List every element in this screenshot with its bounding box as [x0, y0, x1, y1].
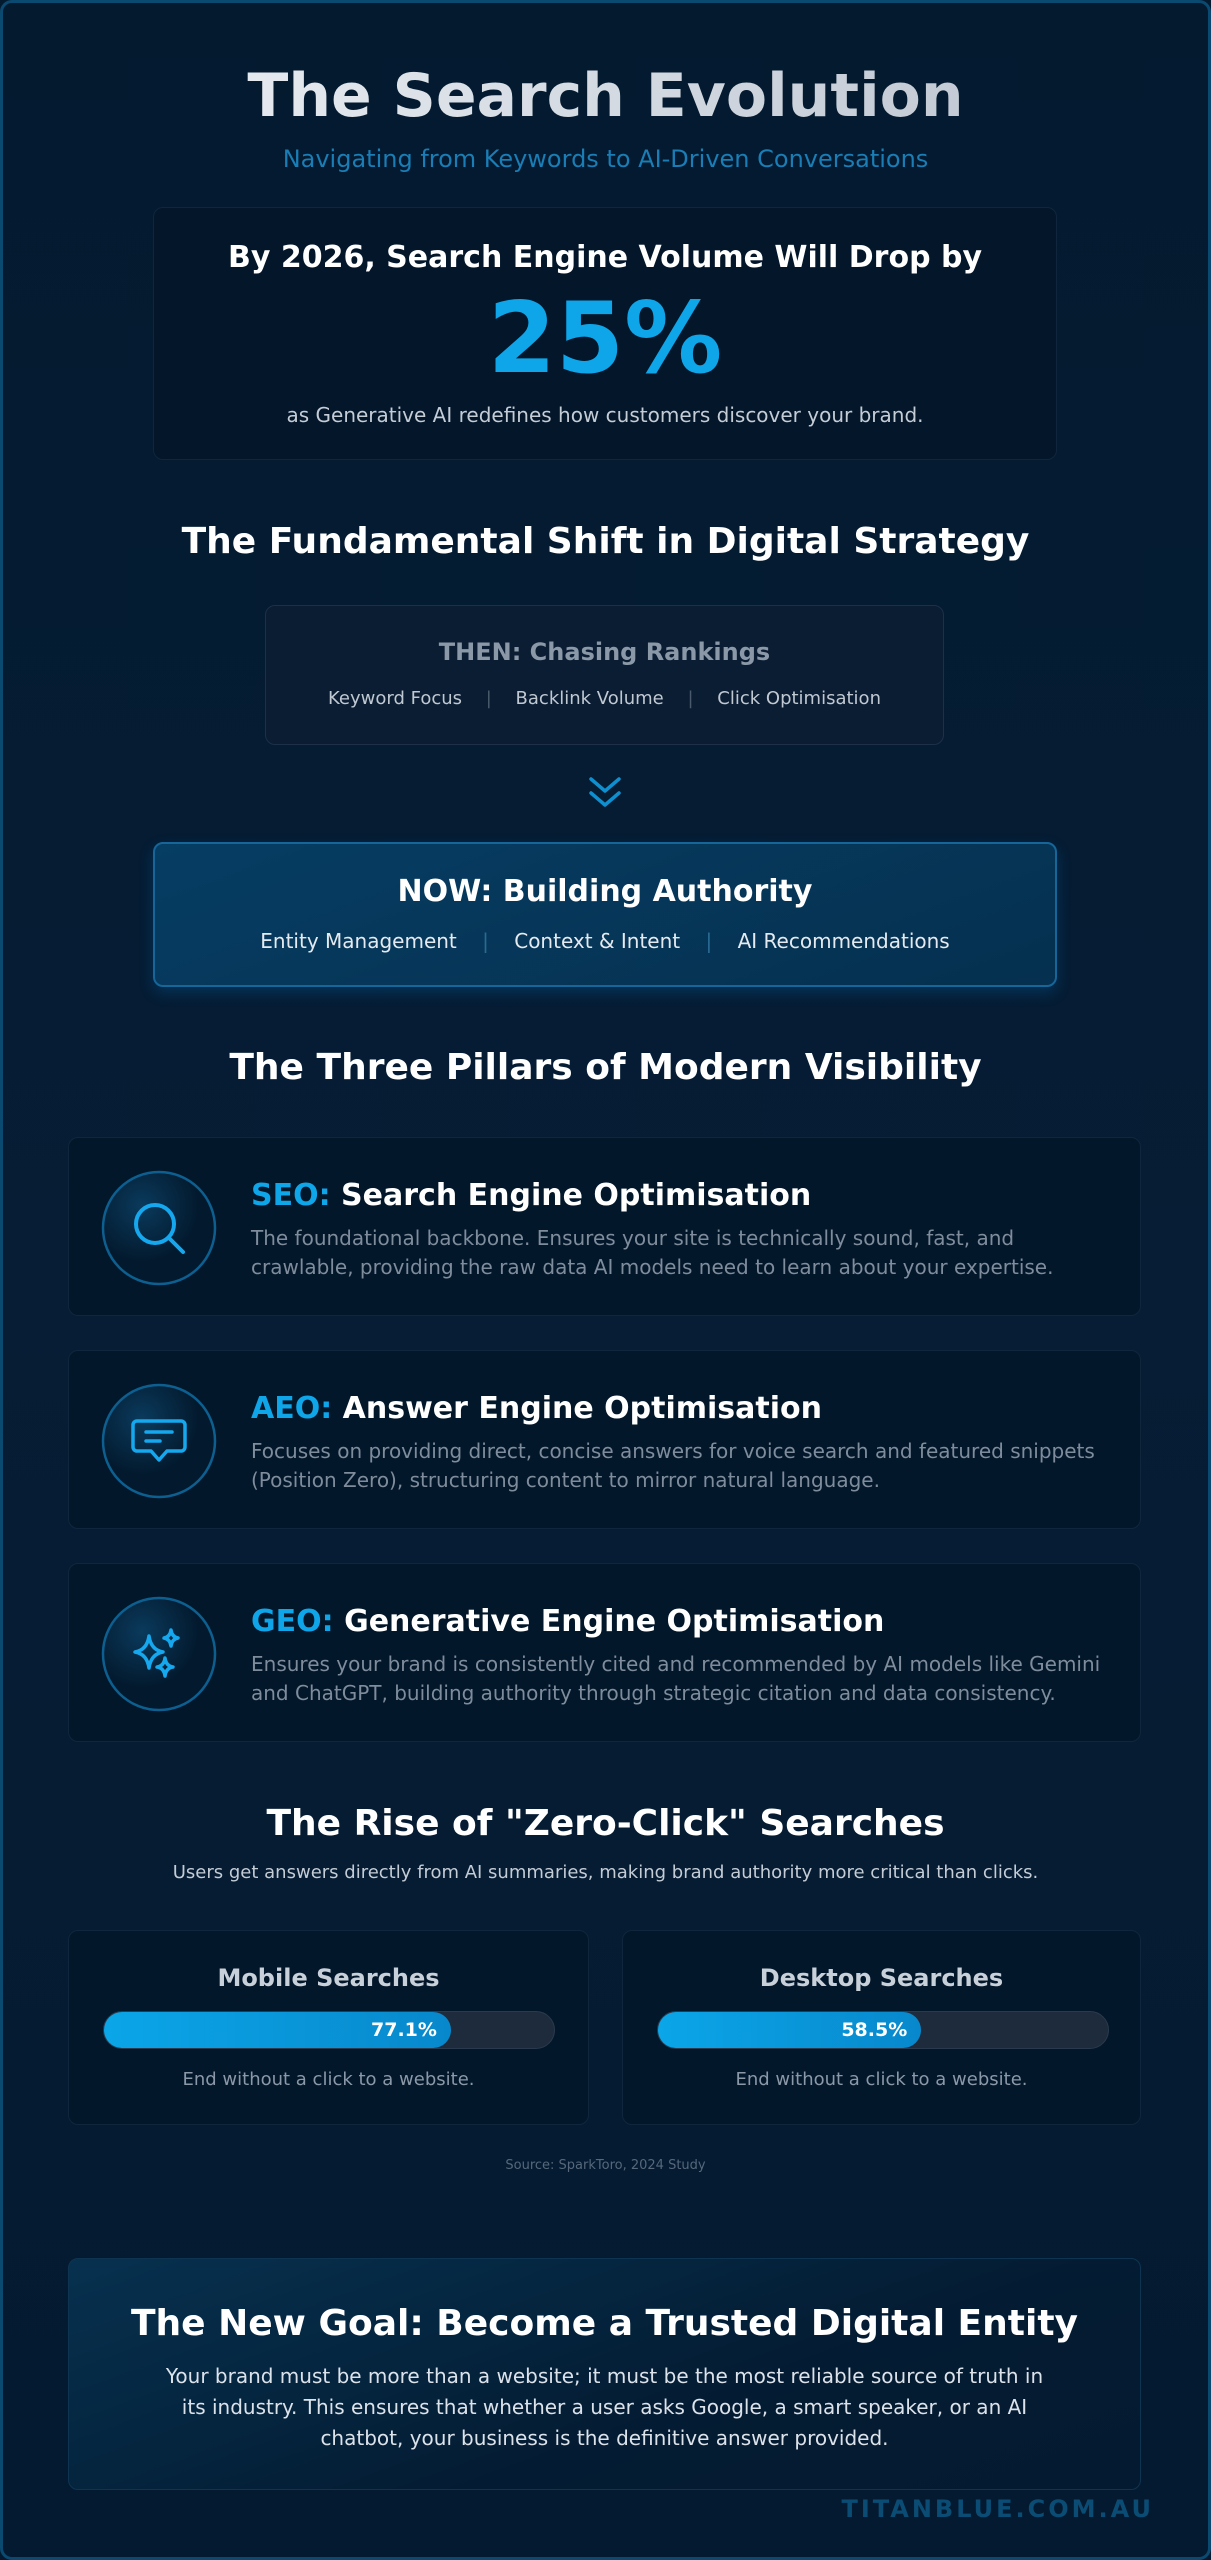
THEN box	[265, 605, 944, 745]
panel: SEO	[68, 1137, 1141, 1316]
stat heading: By 2026, Search Engine Volume Will Drop by	[228, 240, 982, 275]
NOW box	[153, 842, 1057, 987]
SEO text: The foundational backbone. Ensures your site is technically sound, fast, and crawlable, providing the raw data AI models need to learn about your expertise.	[251, 1226, 1053, 1279]
bar: mobile 77.1%: 77.1%	[371, 2019, 437, 2041]
panel: mobile	[68, 1930, 589, 2125]
desktop caption: End without a click to a website.	[735, 2069, 1028, 2090]
goal heading: The New Goal: Become a Trusted Digital Entity	[131, 2303, 1078, 2344]
arrow: chevron down	[589, 777, 621, 807]
stat box	[153, 207, 1057, 460]
then heading: THEN: Chasing Rankings	[439, 638, 770, 666]
desktop title: Desktop Searches	[760, 1964, 1003, 1992]
then items: Keyword Focus | Backlink Volume | Click Optimisation	[328, 688, 881, 709]
heading: fundamental shift: The Fundamental Shift in Digital Strategy	[182, 521, 1029, 562]
stat caption: as Generative AI redefines how customers discover your brand.	[286, 403, 924, 427]
heading: three pillars: The Three Pillars of Modern Visibility	[229, 1047, 982, 1088]
title	[0, 60, 1211, 132]
heading: zero-click: The Rise of "Zero-Click" Searches	[266, 1803, 945, 1844]
source note: Source: SparkToro, 2024 Study	[505, 2158, 706, 2173]
bar: desktop 58.5%: 58.5%	[841, 2019, 907, 2041]
GEO text: Ensures your brand is consistently cited and recommended by AI models like Gemini and ChatGPT, building authority through strategic citation and data consistency.	[251, 1652, 1100, 1705]
subtitle: Navigating from Keywords to AI-Driven Conversations	[283, 145, 928, 173]
panel: desktop	[622, 1930, 1141, 2125]
brand footer: TITANBLUE.COM.AU	[841, 2495, 1154, 2523]
zero-click subtitle: Users get answers directly from AI summaries, making brand authority more critical than clicks.	[173, 1862, 1038, 1883]
AEO text: Focuses on providing direct, concise answers for voice search and featured snippets (Position Zero), structuring content to mirror natural language.	[251, 1439, 1095, 1492]
GEO heading: GEO: Generative Engine Optimisation	[251, 1604, 884, 1639]
now items: Entity Management | Context & Intent | AI Recommendations	[260, 929, 950, 953]
panel: AEO	[68, 1350, 1141, 1529]
title: The Search Evolution	[247, 61, 964, 131]
AEO heading: AEO: Answer Engine Optimisation	[251, 1391, 822, 1426]
panel: GEO	[68, 1563, 1141, 1742]
icon: search	[102, 1170, 216, 1286]
SEO heading: SEO: Search Engine Optimisation	[251, 1178, 811, 1213]
mobile title: Mobile Searches	[217, 1964, 440, 1992]
now heading: NOW: Building Authority	[398, 874, 812, 909]
icon: chat	[102, 1384, 216, 1498]
mobile caption: End without a click to a website.	[182, 2069, 474, 2090]
bar: desktop 58.5%	[657, 2011, 1109, 2049]
icon: sparkles	[102, 1596, 216, 1712]
bar: mobile 77.1%	[103, 2011, 555, 2049]
goal text: Your brand must be more than a website; it must be the most reliable source of truth in its industry. This ensures that whether a user asks Google, a smart speaker, or an AI chatbot, your business is the definitive answer provided.	[166, 2364, 1043, 2450]
big number: 25%	[488, 282, 722, 396]
panel: new goal	[68, 2258, 1141, 2490]
